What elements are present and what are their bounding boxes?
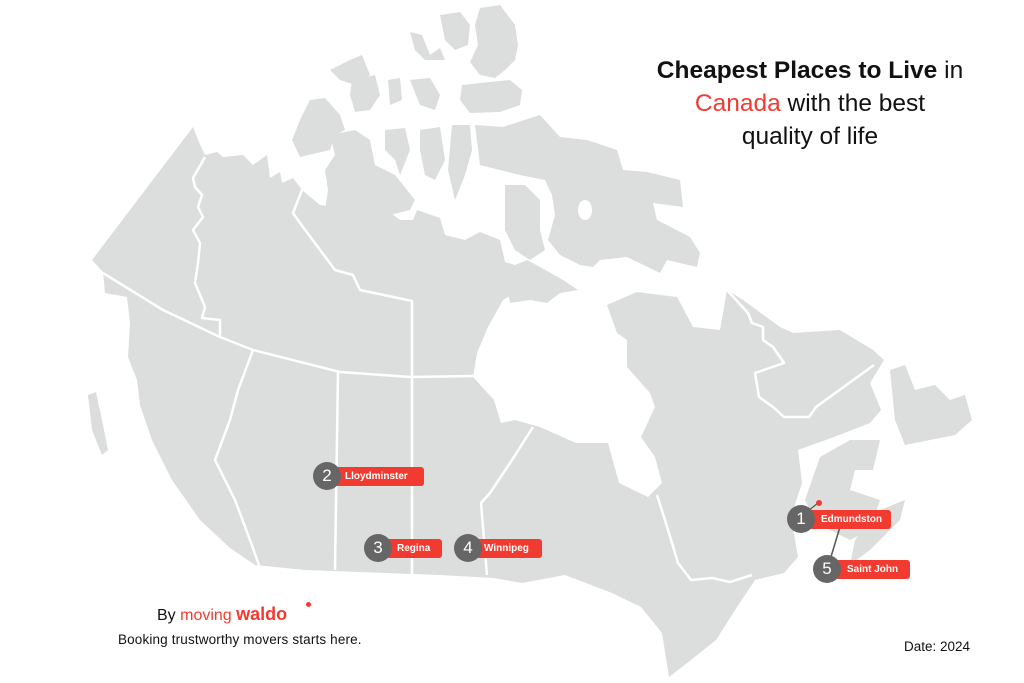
southampton island (503, 260, 578, 303)
marker 3: Regina: 3 (373, 538, 383, 557)
title: Canada with the best (695, 90, 925, 117)
marker 3: Regina (364, 534, 442, 562)
haida gwaii (88, 392, 108, 455)
tagline: Booking trustworthy movers starts here. (118, 632, 362, 647)
marker 1: Edmundston: 1 (796, 509, 806, 528)
mainland (92, 127, 884, 677)
date: Date: 2024 (904, 639, 970, 654)
marker 5: Saint John: Saint John (847, 564, 898, 575)
province borders (103, 157, 874, 582)
marker 3: Regina: Regina (397, 543, 430, 554)
marker 4: Winnipeg: Winnipeg (484, 543, 529, 554)
marker 1: Edmundston (787, 505, 891, 533)
marker 4: Winnipeg: 4 (463, 538, 473, 557)
marker 2: Lloydminster: 2 (322, 466, 332, 485)
marker 5: Saint John: 5 (822, 559, 832, 578)
title: Cheapest Places to Live in (657, 57, 963, 84)
marker 4: Winnipeg (454, 534, 542, 562)
marker 2: Lloydminster: Lloydminster (345, 471, 408, 482)
baffin island (475, 115, 700, 273)
marker 5: Saint John (813, 555, 910, 583)
maritimes (805, 440, 880, 540)
newfoundland (890, 365, 972, 445)
marker 2: Lloydminster (313, 462, 424, 490)
connector line and red dot (810, 500, 840, 556)
melville peninsula (505, 185, 545, 260)
logo: By moving waldo: By moving waldo (157, 604, 287, 624)
arctic islands (470, 5, 518, 78)
title: quality of life (742, 123, 878, 150)
title (657, 57, 963, 150)
marker 1: Edmundston: Edmundston (821, 514, 882, 525)
